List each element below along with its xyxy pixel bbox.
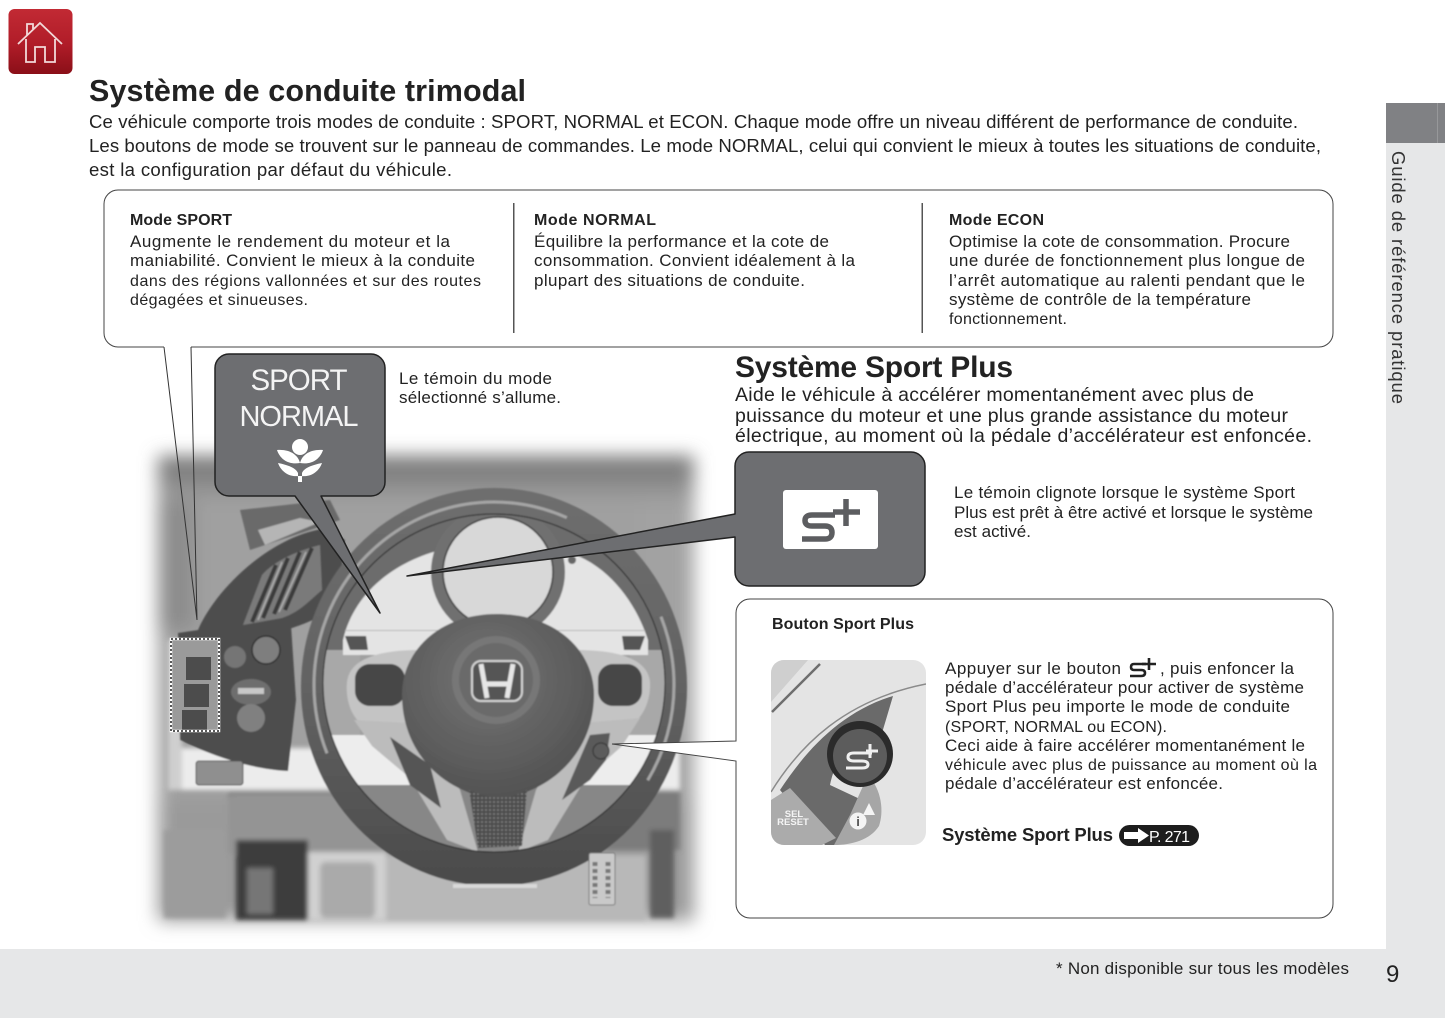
text: sport plus indicator note: est activé. [954, 522, 1031, 541]
pedals [453, 853, 615, 905]
text: mode normal [534, 212, 856, 290]
text: sport plus description: puissance du moteur et une plus grande assistance du moteur [735, 405, 1288, 427]
text: mode normal: consommation. Convient idéalement à la [534, 251, 856, 270]
text: button instructions [945, 658, 1317, 793]
heading: sport plus: Système Sport Plus [735, 351, 1013, 384]
panel: driving modes [104, 190, 1333, 620]
hood ledge [240, 500, 340, 550]
mode buttons dotted frame [171, 639, 219, 734]
text: button instructions: pédale d’accélérateur est enfoncée. [945, 774, 1223, 793]
title: Système de conduite trimodal [89, 74, 526, 108]
photo: steering wheel button: i [856, 814, 860, 829]
photo: steering wheel button: SEL [785, 809, 803, 820]
text: mode econ: Optimise la cote de consommation. Procure [949, 232, 1290, 251]
text: sport plus indicator note: Plus est prêt à être activé et lorsque le système [954, 503, 1313, 522]
text: sport plus description [735, 384, 1312, 447]
steering wheel spokes [347, 650, 650, 852]
text: sport plus description: électrique, au moment où la pédale d’accélérateur est enfoncée. [735, 425, 1312, 447]
text: mode normal: Équilibre la performance et la cote de [534, 232, 829, 251]
page number: 9 [1386, 961, 1399, 988]
side tab [1386, 103, 1445, 949]
gauge ring [437, 511, 576, 633]
text: button instructions: , puis enfoncer la [1160, 659, 1295, 678]
text: button instructions: Appuyer sur le bouton [945, 659, 1121, 678]
text: mode indicator note [399, 369, 561, 407]
wheel interior dark [320, 510, 670, 855]
text: sport plus indicator note [954, 483, 1313, 541]
steering wheel rim [301, 488, 687, 886]
text: button instructions: Sport Plus peu importe le mode de conduite [945, 697, 1290, 716]
icon: econ leaf [277, 439, 323, 482]
text: mode sport: dégagées et sinueuses. [130, 292, 308, 309]
side tab: Guide de référence pratique [1388, 151, 1409, 404]
Honda emblem [452, 636, 540, 724]
text: sport plus indicator note: Le témoin clignote lorsque le système Sport [954, 483, 1295, 502]
icon: page reference pill: P. 271 [1149, 829, 1190, 846]
callout: mode indicator: NORMAL [240, 401, 358, 433]
instrument cluster [343, 550, 648, 655]
text: mode econ: système de contrôle de la température [949, 290, 1251, 309]
text: button label: Bouton Sport Plus [772, 616, 914, 633]
text: button instructions: (SPORT, NORMAL ou ECON). [945, 719, 1167, 736]
text: mode sport [130, 212, 481, 309]
horn mesh [469, 790, 527, 848]
text: mode normal: Mode NORMAL [534, 212, 656, 229]
text: mode econ: l’arrêt automatique au ralenti pendant que le [949, 271, 1305, 290]
icon: s plus [783, 490, 878, 549]
photo: steering wheel button [771, 660, 926, 845]
text: mode econ: une durée de fonctionnement plus longue de [949, 251, 1305, 270]
text: button instructions: pédale d’accélérateur pour activer de système [945, 678, 1304, 697]
text: mode normal: plupart des situations de conduite. [534, 271, 805, 290]
dashboard light band [164, 640, 680, 920]
text: mode econ: Mode ECON [949, 212, 1044, 229]
text: mode econ [949, 212, 1305, 328]
illustration background [158, 456, 694, 921]
text: button instructions: Ceci aide à faire accélérer momentanément le [945, 736, 1305, 755]
icon: inline s plus [1130, 658, 1156, 676]
text: mode sport: Augmente le rendement du moteur et la [130, 232, 451, 251]
icon: home button [8, 9, 72, 74]
callout: sport plus indicator [407, 452, 925, 586]
text: mode sport: dans des régions vallonnées et sur des routes [130, 273, 481, 290]
icon: page reference pill [1119, 825, 1199, 846]
text: mode sport: Mode SPORT [130, 212, 232, 229]
text: mode sport: maniabilité. Convient le mieux à la conduite [130, 251, 475, 270]
airbag cover [402, 614, 594, 800]
text: mode econ: fonctionnement. [949, 311, 1067, 328]
dashboard illustration [158, 456, 694, 921]
callout: mode indicator [215, 354, 385, 613]
intro text [89, 111, 1321, 180]
panel: sport plus button [612, 599, 1333, 918]
callout: mode indicator: SPORT [250, 364, 348, 397]
text: sport plus description: Aide le véhicule à accélérer momentanément avec plus de [735, 384, 1254, 406]
photo: steering wheel button: RESET [777, 817, 809, 828]
text: mode indicator note: sélectionné s’allume. [399, 388, 561, 407]
intro text: Ce véhicule comporte trois modes de conduite : SPORT, NORMAL et ECON. Chaque mode offre un niveau différent de performance de conduite. [89, 111, 1298, 132]
steering wheel button pads [355, 664, 642, 759]
text: button instructions: véhicule avec plus de puissance au moment où la [945, 757, 1317, 774]
footnote: * Non disponible sur tous les modèles [1056, 959, 1349, 978]
intro text: Les boutons de mode se trouvent sur le panneau de commandes. Le mode NORMAL, celui qui convient le mieux à toutes les situations de conduite, [89, 135, 1321, 156]
callout pointer to mode buttons [164, 347, 197, 620]
intro text: est la configuration par défaut du véhicule. [89, 159, 452, 180]
text: page reference: Système Sport Plus [942, 824, 1113, 845]
left console with vent [178, 528, 345, 771]
footer band [0, 949, 1445, 1018]
text: mode indicator note: Le témoin du mode [399, 369, 552, 388]
